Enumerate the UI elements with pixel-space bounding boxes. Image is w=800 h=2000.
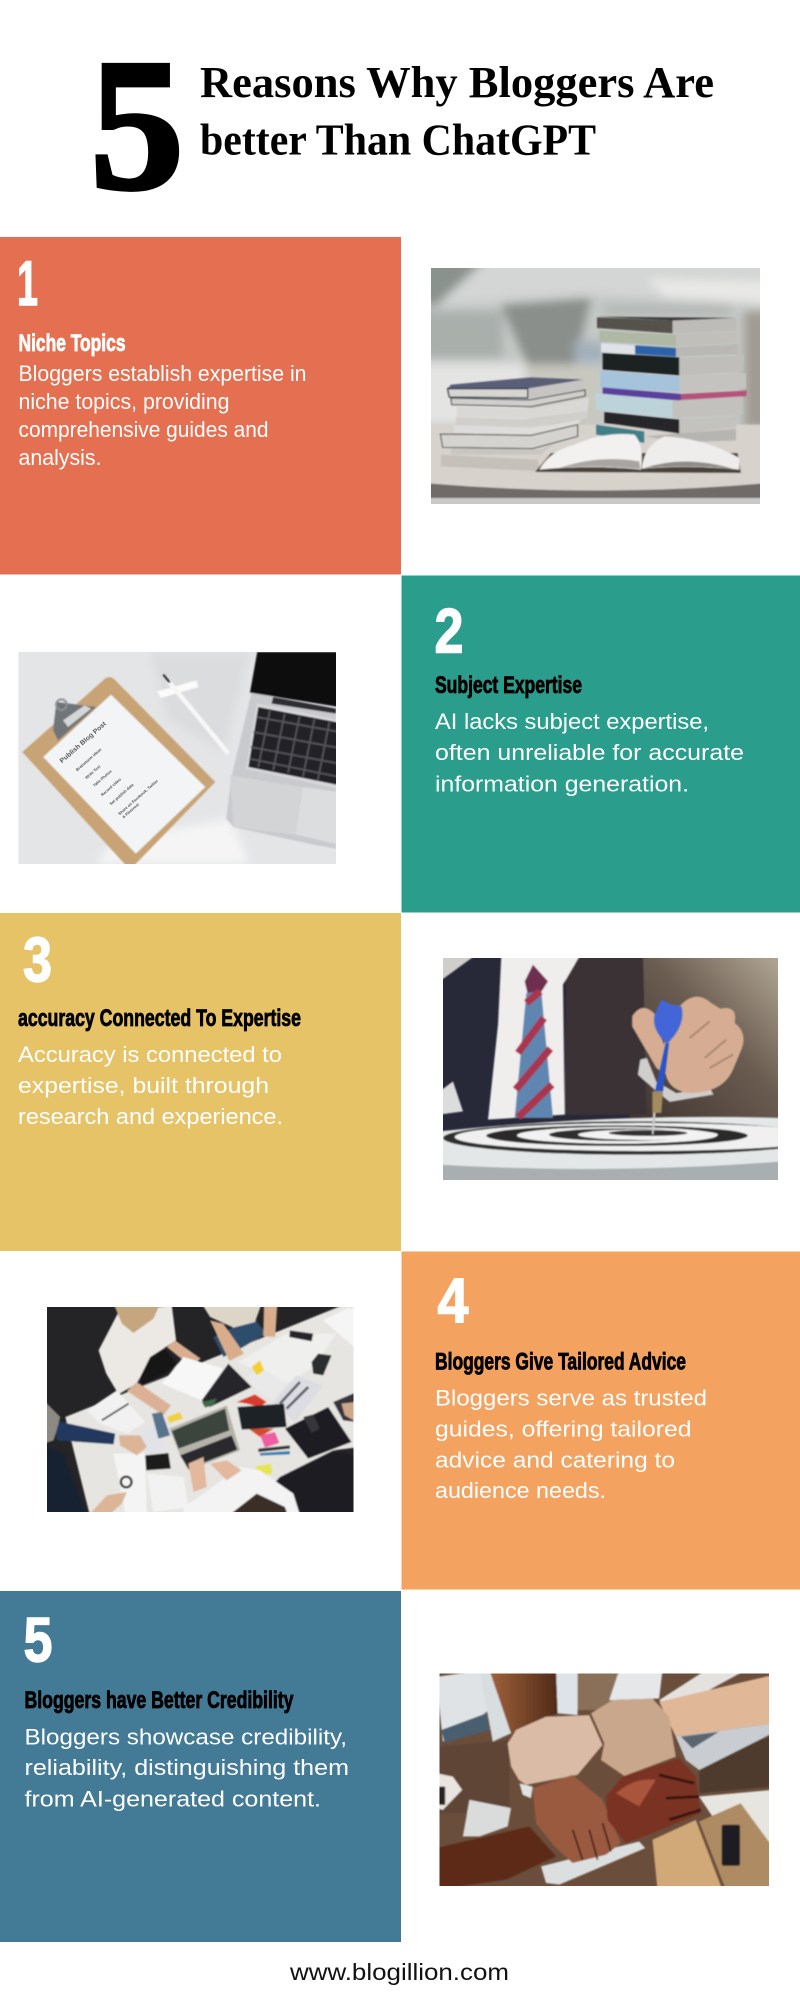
laptop xyxy=(226,692,336,849)
photo: four hands linked in a square xyxy=(440,1674,769,1886)
number 4: 4 xyxy=(438,1266,468,1336)
small items xyxy=(289,1330,313,1341)
heading: subject expertise: Subject Expertise xyxy=(435,672,582,699)
body text: often unreliable for accurate xyxy=(435,740,744,765)
left stack xyxy=(448,377,584,389)
lower arm xyxy=(436,1826,556,1890)
body text: audience needs. xyxy=(435,1478,606,1503)
body text: niche topics, providing xyxy=(18,389,230,414)
papers and desk items xyxy=(436,1670,489,1742)
body text: Bloggers establish expertise in xyxy=(18,361,306,386)
heading: bloggers have better credibility: Bloggers have Better Credibility xyxy=(24,1687,294,1714)
dark hand xyxy=(606,1758,701,1843)
body text: guides, offering tailored xyxy=(435,1417,692,1442)
panel: reason 2 subject expertise xyxy=(402,576,800,912)
typing hands and sleeve xyxy=(183,1467,301,1517)
top arm xyxy=(489,1670,558,1733)
hand xyxy=(632,997,744,1093)
body text: information generation. xyxy=(435,772,689,796)
left man xyxy=(54,1420,115,1444)
woman xyxy=(130,1347,178,1385)
heading: bloggers give tailored advice: Bloggers Give Tailored Advice xyxy=(435,1349,686,1376)
dart xyxy=(652,1000,682,1135)
table xyxy=(65,1304,360,1517)
target board xyxy=(440,1117,800,1185)
panel: reason 4 tailored advice xyxy=(402,1252,800,1590)
number 1: 1 xyxy=(17,249,38,319)
panel: reason 5 credibility xyxy=(0,1591,401,1942)
body text: reliability, distinguishing them xyxy=(24,1755,349,1780)
body text xyxy=(24,1725,349,1812)
body text: advice and catering to xyxy=(435,1448,675,1473)
body text: analysis. xyxy=(18,445,102,470)
title text: better Than ChatGPT xyxy=(200,116,596,165)
photo: clipboard and laptop xyxy=(18,652,336,864)
number 3: 3 xyxy=(23,926,52,996)
photo: team working around a table xyxy=(47,1307,354,1512)
photo: stack of books xyxy=(431,268,760,504)
right arm xyxy=(659,1675,772,1737)
body text: research and experience. xyxy=(18,1104,283,1129)
clipboard text: & Pinterest xyxy=(121,801,141,819)
clipboard text: Record video xyxy=(100,776,122,797)
number 2: 2 xyxy=(434,596,464,666)
pen xyxy=(157,680,199,698)
body text: Accuracy is connected to xyxy=(18,1042,282,1067)
body text xyxy=(18,1042,283,1129)
number 5: 5 xyxy=(24,1606,52,1676)
clipboard text: Brainstorm ideas xyxy=(75,746,103,772)
body text: AI lacks subject expertise, xyxy=(435,709,709,734)
wood tone xyxy=(578,1670,618,1710)
panel: reason 1 niche topics xyxy=(0,237,401,574)
body text: Bloggers serve as trusted xyxy=(435,1386,707,1410)
cuff xyxy=(638,1058,714,1102)
clipboard text: Take Photos xyxy=(92,768,113,788)
body text xyxy=(435,1386,707,1503)
light hand xyxy=(591,1698,676,1776)
title xyxy=(90,20,714,229)
brown hand xyxy=(533,1775,621,1863)
right stack xyxy=(597,317,737,321)
body text xyxy=(18,361,306,470)
panel: reason 3 accuracy xyxy=(0,913,401,1251)
papers on table xyxy=(238,1334,337,1384)
laptop xyxy=(169,1405,240,1470)
heading: niche topics: Niche Topics xyxy=(18,330,126,357)
heading: accuracy connected to expertise: accuracy Connected To Expertise xyxy=(18,1005,301,1032)
man at top xyxy=(213,1317,266,1357)
title text xyxy=(200,58,714,165)
clipboard xyxy=(22,677,215,865)
body text: comprehensive guides and xyxy=(18,417,268,442)
pale hand xyxy=(508,1715,603,1785)
body text: expertise, built through xyxy=(18,1073,269,1098)
clipboard text: Set publish date xyxy=(108,782,135,806)
open book xyxy=(535,453,741,473)
clipboard text: Share on Facebook, Twitter xyxy=(117,778,159,816)
shirt xyxy=(488,955,580,1120)
tie xyxy=(525,965,548,995)
footer website: www.blogillion.com xyxy=(289,1959,509,1985)
clipboard text: Write Text xyxy=(84,763,102,780)
clipboard text: Publish Blog Post xyxy=(59,720,108,765)
body text: Bloggers showcase credibility, xyxy=(24,1725,347,1750)
table xyxy=(424,425,768,492)
body text: from AI-generated content. xyxy=(24,1786,321,1812)
clipboard text xyxy=(59,720,159,819)
big numeral 5: 5 xyxy=(90,20,184,229)
title text: Reasons Why Bloggers Are xyxy=(200,58,714,107)
body text xyxy=(435,709,744,796)
photo: dart hitting target xyxy=(443,958,778,1180)
tan arm xyxy=(653,1820,722,1890)
